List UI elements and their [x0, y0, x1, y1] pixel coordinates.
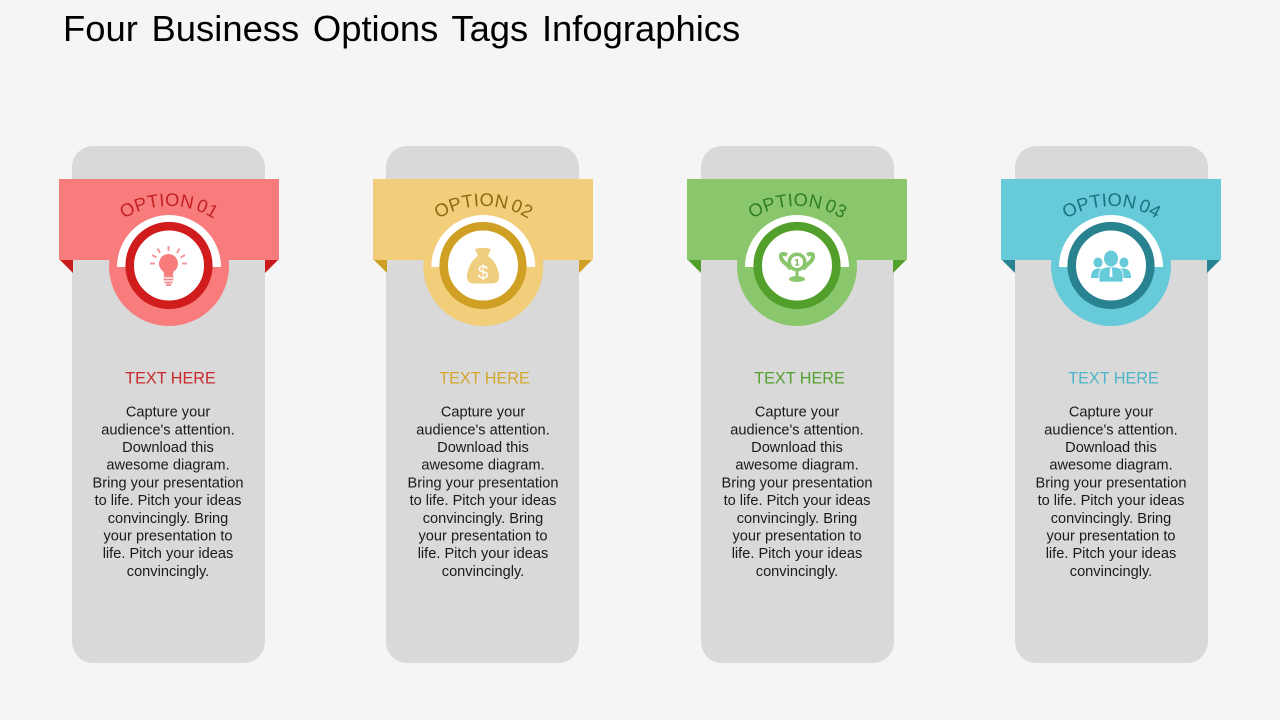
body text: Capture your [126, 405, 210, 421]
heading: TEXT HERE [754, 370, 845, 388]
body text: to life. Pitch your ideas [95, 493, 241, 509]
body text: Download this [751, 440, 843, 456]
body text: your presentation to [1046, 528, 1176, 544]
body text: life. Pitch your ideas [103, 546, 233, 562]
body text: convincingly. Bring [1051, 511, 1171, 527]
body text: life. Pitch your ideas [732, 546, 862, 562]
ring [444, 226, 522, 305]
body text: Download this [437, 440, 529, 456]
icon: trophy [781, 252, 813, 282]
icon: trophy: 1 [794, 258, 800, 268]
body text: audience's attention. [101, 422, 235, 438]
ring [758, 226, 836, 305]
body text: Capture your [441, 405, 525, 421]
panel: option 02 [373, 146, 593, 663]
panel: option 01 [59, 146, 279, 663]
body text: convincingly. [1070, 564, 1152, 580]
card background [1015, 146, 1208, 663]
body text: convincingly. [127, 564, 209, 580]
title: Four Business Options Tags Infographics [63, 8, 740, 49]
ribbon [1001, 179, 1221, 260]
ribbon fold left [1001, 259, 1015, 273]
option label: OPTION04 [1063, 193, 1160, 218]
body text: to life. Pitch your ideas [410, 493, 556, 509]
white arc [745, 215, 849, 267]
ribbon fold right [1207, 259, 1221, 273]
ribbon [59, 179, 279, 260]
icon: business team [1091, 250, 1131, 282]
card background [72, 146, 265, 663]
badge circle [109, 206, 229, 326]
body text: Bring your presentation [93, 475, 243, 491]
ring [1072, 226, 1150, 305]
body text: your presentation to [104, 528, 232, 544]
body text: Bring your presentation [408, 475, 558, 491]
body text: convincingly. Bring [423, 511, 543, 527]
body text: Download this [1065, 440, 1157, 456]
body text: awesome diagram. [106, 458, 230, 474]
body text: convincingly. [442, 564, 524, 580]
body text: life. Pitch your ideas [1046, 546, 1176, 562]
heading: TEXT HERE [1068, 370, 1159, 388]
body text: your presentation to [418, 528, 548, 544]
badge circle [1051, 206, 1171, 326]
ribbon fold left [59, 259, 73, 273]
white arc [117, 215, 221, 267]
body text: to life. Pitch your ideas [724, 493, 870, 509]
body text: Bring your presentation [1036, 475, 1186, 491]
option label: OPTION02 [435, 193, 532, 218]
body text: Download this [122, 440, 214, 456]
body text: awesome diagram. [421, 458, 545, 474]
ribbon fold left [687, 259, 701, 273]
card background [386, 146, 579, 663]
body text: audience's attention. [1044, 422, 1178, 438]
body text: audience's attention. [730, 422, 864, 438]
icon: money bag [467, 248, 499, 284]
ribbon fold left [373, 259, 387, 273]
option label: OPTION03 [749, 193, 846, 218]
body text: to life. Pitch your ideas [1038, 493, 1184, 509]
option label: OPTION01 [120, 193, 216, 218]
icon: money bag: $ [478, 263, 489, 284]
ribbon fold right [579, 259, 593, 273]
body text: Capture your [1069, 405, 1153, 421]
white arc [431, 215, 535, 267]
body text: convincingly. Bring [737, 511, 857, 527]
body text: awesome diagram. [735, 458, 859, 474]
body text: Capture your [755, 405, 839, 421]
ring [130, 226, 208, 305]
ribbon [373, 179, 593, 260]
white arc [1059, 215, 1163, 267]
body text: Bring your presentation [722, 475, 872, 491]
ribbon fold right [893, 259, 907, 273]
ribbon [687, 179, 907, 260]
panel: option 03 [687, 146, 907, 663]
body text: convincingly. [756, 564, 838, 580]
badge circle [737, 206, 857, 326]
body text: convincingly. Bring [108, 511, 228, 527]
body text: your presentation to [732, 528, 862, 544]
body text: life. Pitch your ideas [418, 546, 548, 562]
badge circle [423, 206, 543, 326]
body text: awesome diagram. [1049, 458, 1173, 474]
card background [701, 146, 894, 663]
heading: TEXT HERE [439, 370, 530, 388]
ribbon fold right [265, 259, 279, 273]
icon: light bulb [150, 246, 187, 285]
heading: TEXT HERE [125, 370, 216, 388]
body text: audience's attention. [416, 422, 550, 438]
panel: option 04 [1001, 146, 1221, 663]
